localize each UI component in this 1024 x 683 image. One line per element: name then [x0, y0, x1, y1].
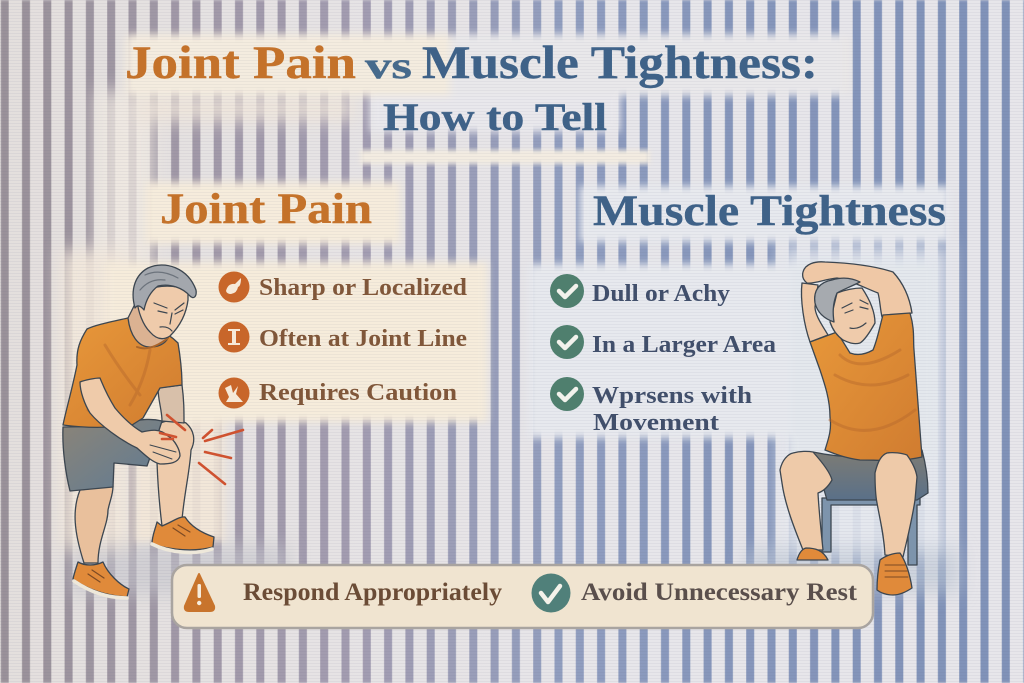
symptom: worsens with movement: Wprsens with	[592, 383, 752, 409]
label: respond appropriately: Respond Appropriately	[243, 579, 503, 606]
pain lines	[160, 415, 243, 484]
symptom: requires caution	[218, 378, 457, 408]
title: Muscle Tightness: Muscle Tightness:	[422, 37, 818, 89]
symptom: worsens with movement: Movement	[593, 410, 719, 436]
symptom: larger area	[550, 325, 776, 359]
heading: Muscle Tightness: Muscle Tightness	[593, 188, 946, 235]
title: vs: vs	[365, 45, 412, 87]
symptom: joint line	[218, 322, 467, 352]
symptom: larger area: In a Larger Area	[592, 332, 776, 358]
panel: joint pain	[160, 186, 468, 408]
symptom: sharp or localized	[218, 272, 468, 302]
symptom: joint line: Often at Joint Line	[259, 326, 467, 352]
symptom: worsens with movement	[550, 377, 752, 436]
symptom: dull or achy: Dull or Achy	[592, 281, 730, 307]
heading: Joint Pain: Joint Pain	[160, 186, 372, 233]
illustration: man stretching on chair	[780, 262, 928, 595]
illustration: man holding knee	[63, 265, 243, 598]
icon: check	[532, 574, 570, 612]
label: avoid unnecessary rest: Avoid Unnecessary Rest	[581, 579, 858, 606]
subtitle: How to Tell	[383, 96, 607, 139]
symptom: sharp or localized: Sharp or Localized	[259, 275, 468, 301]
icon: warning	[185, 574, 214, 611]
panel: muscle tightness	[550, 188, 946, 436]
title: Joint Pain: Joint Pain	[125, 37, 356, 89]
title	[125, 37, 818, 139]
symptom: dull or achy	[550, 274, 730, 308]
symptom: requires caution: Requires Caution	[259, 380, 457, 406]
callout bar	[172, 565, 873, 628]
